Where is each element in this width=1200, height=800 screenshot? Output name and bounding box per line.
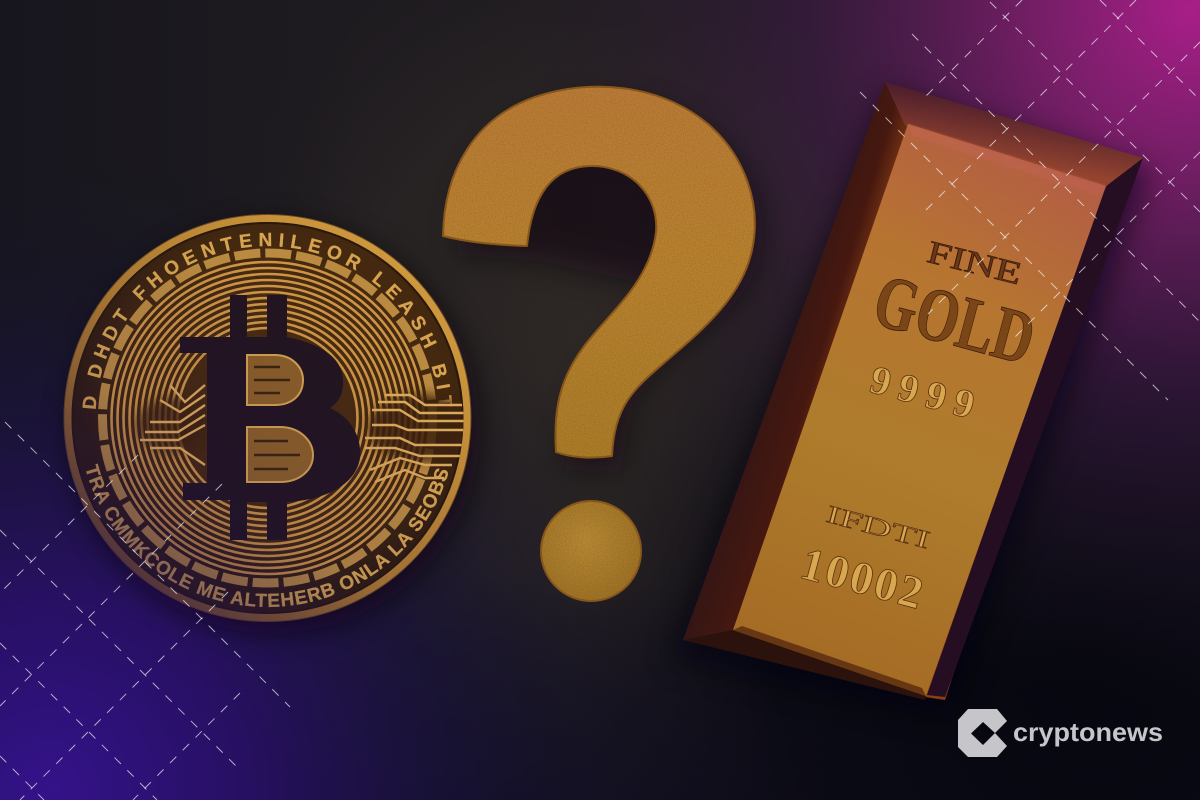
question mark: [443, 87, 763, 601]
bar top bevel: [885, 82, 1143, 187]
bar right bevel: [927, 158, 1143, 697]
dashed lattice: top right: [860, 0, 1200, 400]
bar front face: [733, 124, 1106, 696]
bar engraving: FINE: [924, 233, 1026, 291]
coin concentric circuit rings: [102, 253, 432, 583]
gold bar: [670, 82, 1150, 720]
bitcoin coin: [60, 214, 485, 646]
logo wordmark: cryptonews: [1013, 717, 1163, 747]
bar engraving: 10002: [796, 537, 928, 619]
coin circuit traces: [136, 385, 472, 482]
upper bowl: [247, 355, 303, 405]
dashed lattice: bottom left: [0, 422, 290, 800]
coin legend text: TRA CMMKCOLE ME ALTEHERB ONLA LA SEOBS: [86, 464, 448, 608]
question mark dot: [541, 501, 641, 601]
bar engraving: GOLD: [865, 258, 1044, 381]
bar outer body: [683, 82, 1143, 700]
coin legend text: [82, 232, 452, 608]
lower bowl: [247, 427, 313, 482]
bar engraving: 9999: [865, 357, 980, 427]
cryptonews logo: [958, 709, 1163, 757]
coin legend text: D DHDT FHOENTENILEOR LEASH BIT: [82, 232, 452, 409]
logo icon: [958, 709, 1007, 757]
bitcoin symbol: [180, 295, 360, 540]
bar engraving: [796, 233, 1044, 619]
bar engraving: IFDTI: [823, 501, 933, 555]
